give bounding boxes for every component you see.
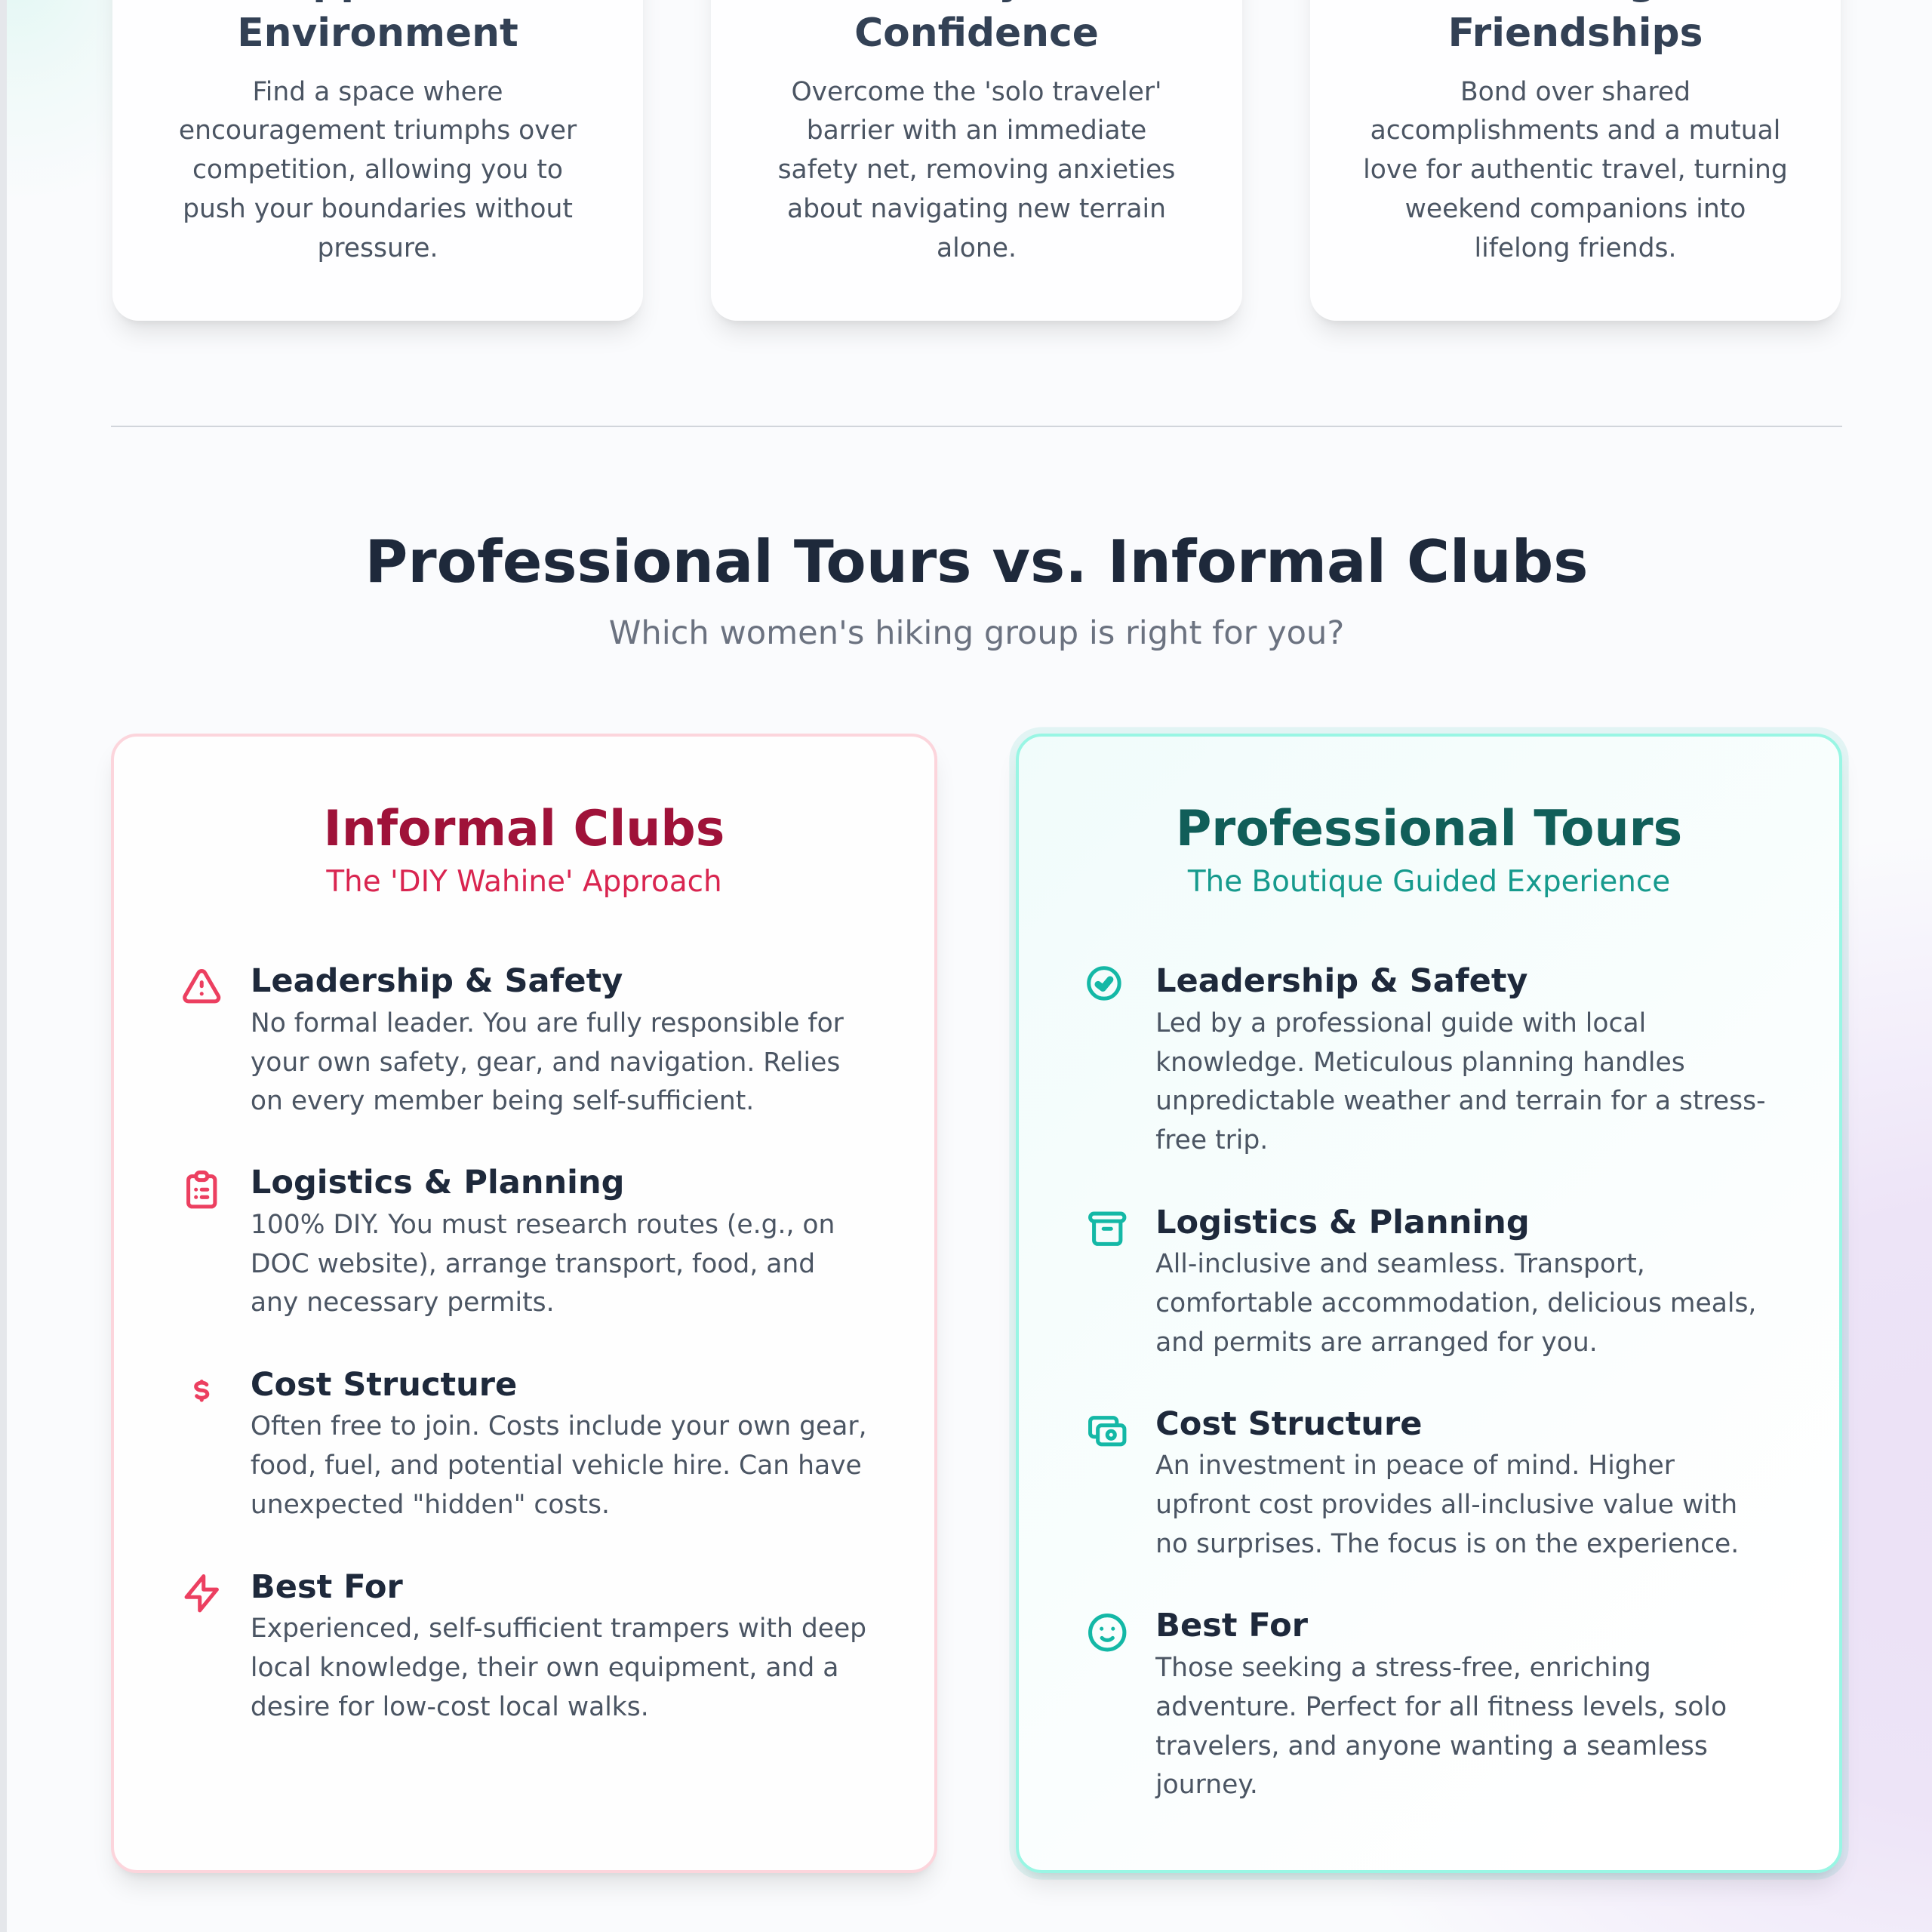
item text: journey. [1155, 1770, 1258, 1800]
card text: barrier with an immediate [807, 115, 1146, 146]
item text: local knowledge, their own equipment, and a [251, 1653, 838, 1683]
item text: no surprises. The focus is on the experience. [1155, 1529, 1739, 1559]
item text: comfortable accommodation, delicious meals, [1155, 1288, 1756, 1318]
informal item: cost structure [194, 1366, 867, 1520]
professional item: best for [1088, 1607, 1727, 1800]
item text: your own safety, gear, and navigation. Relies [251, 1048, 840, 1078]
item text [1155, 1249, 1756, 1358]
item text: travelers, and anyone wanting a seamless [1155, 1731, 1708, 1761]
card text: about navigating new terrain [787, 194, 1166, 224]
item text: 100% DIY. You must research routes (e.g., on [251, 1210, 835, 1240]
item text: and permits are arranged for you. [1155, 1327, 1598, 1358]
card text: accomplishments and a mutual [1371, 115, 1780, 146]
section heading: Professional Tours vs. Informal Clubs [365, 528, 1588, 596]
panel subtitle: The 'DIY Wahine' Approach [326, 865, 722, 899]
icon: banknotes [1088, 1416, 1126, 1446]
item title: Best For [251, 1568, 403, 1606]
card title: Friendships [1448, 11, 1703, 56]
icon: dollar sign [194, 1380, 210, 1402]
item text: Experienced, self-sufficient trampers with deep [251, 1614, 866, 1644]
panel: informal clubs [111, 734, 937, 1873]
icon: check circle [1087, 966, 1121, 1001]
item title: Best For [1155, 1607, 1308, 1644]
item text [251, 1614, 866, 1722]
card text [179, 77, 577, 263]
item text: unexpected "hidden" costs. [251, 1490, 610, 1520]
professional item: logistics and planning [1088, 1204, 1756, 1358]
card text: competition, allowing you to [192, 155, 563, 185]
item title: Leadership & Safety [251, 962, 623, 1000]
informal item: best for [184, 1568, 866, 1722]
card text: weekend companions into [1405, 194, 1746, 224]
item text: Often free to join. Costs include your own gear, [251, 1411, 867, 1441]
item text [251, 1008, 844, 1116]
professional item: leadership and safety [1087, 962, 1766, 1155]
item text: food, fuel, and potential vehicle hire. Can have [251, 1451, 862, 1481]
card text: Bond over shared [1460, 77, 1690, 107]
item text: All-inclusive and seamless. Transport, [1155, 1249, 1645, 1279]
informal item: logistics and planning [186, 1164, 835, 1318]
card title: Environment [237, 11, 518, 56]
card text: lifelong friends. [1475, 233, 1676, 263]
card text: pressure. [317, 233, 438, 263]
item text: DOC website), arrange transport, food, and [251, 1248, 815, 1278]
card title: Confidence [854, 11, 1099, 56]
item title: Cost Structure [251, 1366, 517, 1404]
informal item: leadership and safety [183, 962, 844, 1116]
item text: free trip. [1155, 1125, 1268, 1155]
icon: lightning bolt [184, 1574, 219, 1612]
card text: Overcome the 'solo traveler' [791, 77, 1162, 107]
benefit card: lasting friendships [1310, 0, 1841, 321]
section subheading: Which women's hiking group is right for you? [609, 614, 1344, 652]
card text: push your boundaries without [183, 194, 573, 224]
card text [1363, 77, 1788, 263]
icon: archive box [1088, 1212, 1126, 1246]
item text: on every member being self-sufficient. [251, 1086, 754, 1116]
panel title: Professional Tours [1176, 801, 1682, 857]
item text: Those seeking a stress-free, enriching [1155, 1653, 1651, 1683]
card text: encouragement triumphs over [179, 115, 577, 146]
item text [251, 1210, 835, 1318]
benefit card: supportive environment [112, 0, 643, 321]
item text [1155, 1008, 1766, 1155]
card text [778, 77, 1175, 263]
card text: safety net, removing anxieties [778, 155, 1175, 185]
item text [1155, 1653, 1727, 1800]
item text: knowledge. Meticulous planning handles [1155, 1048, 1685, 1078]
panel title: Informal Clubs [324, 801, 724, 857]
item title: Cost Structure [1155, 1405, 1422, 1443]
item title: Logistics & Planning [251, 1164, 624, 1201]
panel subtitle: The Boutique Guided Experience [1188, 865, 1670, 899]
card text: Find a space where [252, 77, 503, 107]
item text: No formal leader. You are fully responsible for [251, 1008, 844, 1038]
item text: any necessary permits. [251, 1287, 555, 1318]
item text: adventure. Perfect for all fitness levels, solo [1155, 1692, 1727, 1722]
item text: upfront cost provides all-inclusive value with [1155, 1490, 1737, 1520]
item title: Leadership & Safety [1155, 962, 1528, 1000]
item text [1155, 1451, 1739, 1559]
item text: unpredictable weather and terrain for a stress- [1155, 1086, 1766, 1116]
professional item: cost structure [1088, 1405, 1739, 1559]
icon: warning triangle [183, 969, 220, 1004]
card text: love for authentic travel, turning [1363, 155, 1788, 185]
panel: professional tours [1016, 734, 1842, 1873]
icon: smiley face [1088, 1614, 1126, 1651]
icon: clipboard list [186, 1171, 217, 1209]
item text: An investment in peace of mind. Higher [1155, 1451, 1675, 1481]
card text: alone. [937, 233, 1017, 263]
item text [251, 1411, 867, 1520]
benefit card: safety and confidence [711, 0, 1242, 321]
item title: Logistics & Planning [1155, 1204, 1530, 1241]
item text: Led by a professional guide with local [1155, 1008, 1646, 1038]
item text: desire for low-cost local walks. [251, 1692, 649, 1722]
